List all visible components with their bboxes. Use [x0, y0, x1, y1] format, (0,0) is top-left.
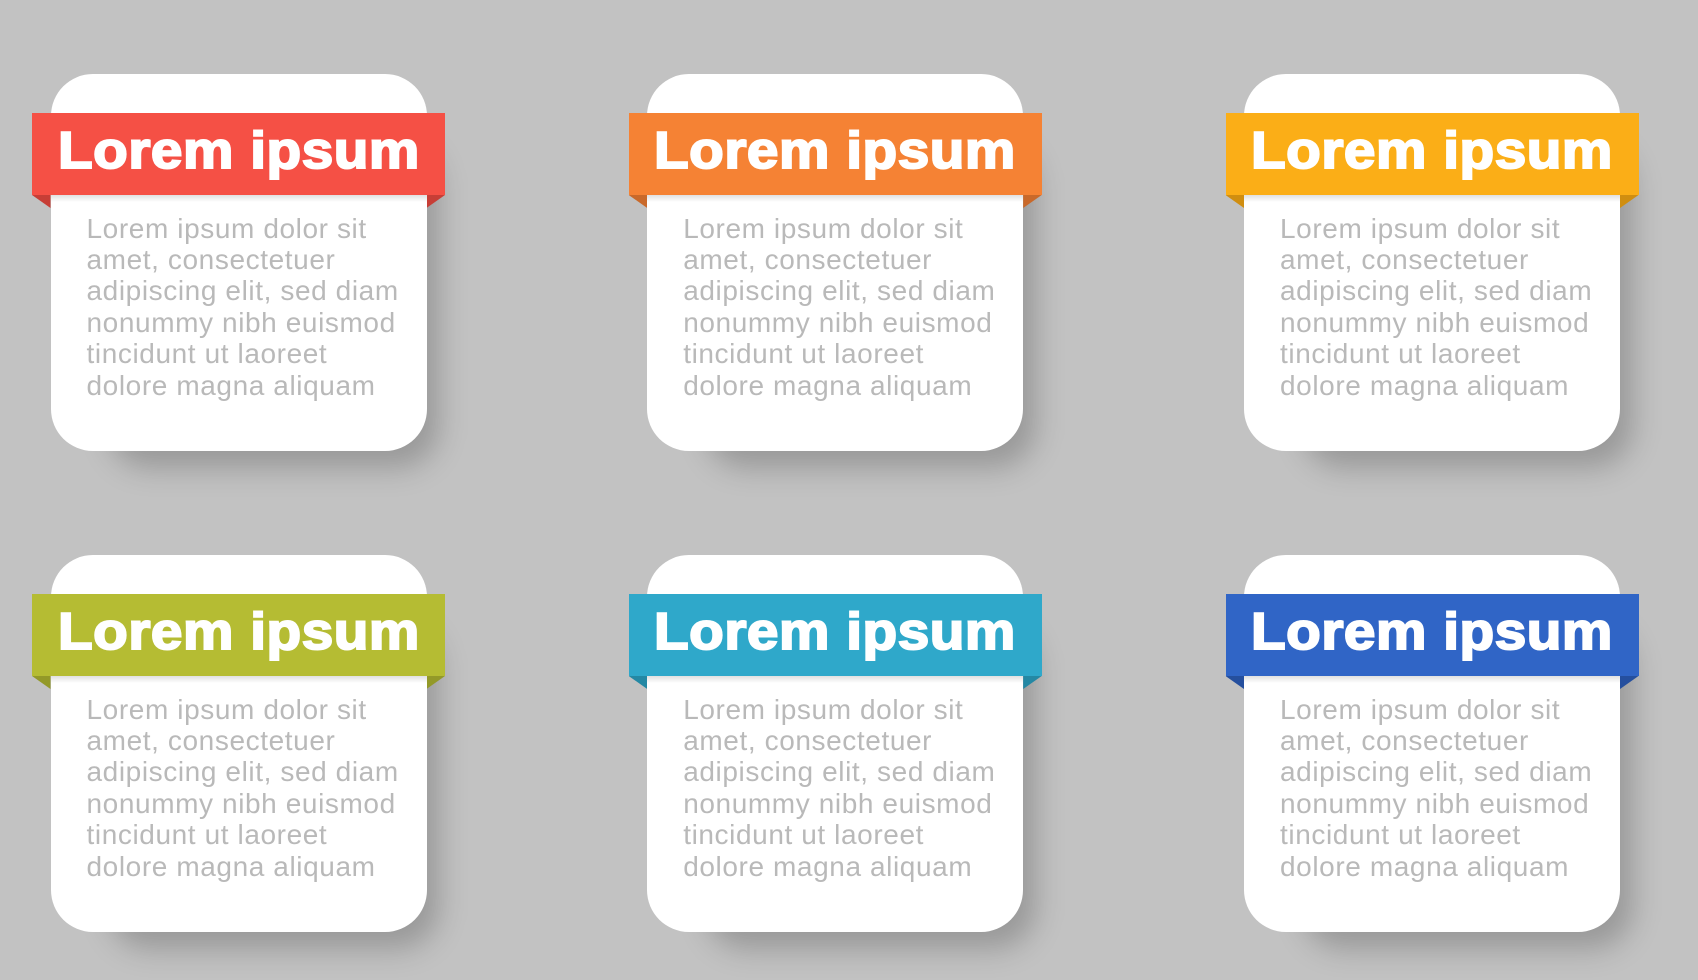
card panel: [647, 74, 1023, 451]
ribbon heading: [32, 594, 445, 676]
body text: Lorem ipsum dolor sit amet, consectetuer adipiscing elit, sed diam nonummy nibh euismod tincidunt ut laoreet dolore magna aliquam: [1280, 694, 1592, 882]
card panel: [50, 555, 426, 932]
body text: Lorem ipsum dolor sit amet, consectetuer adipiscing elit, sed diam nonummy nibh euismod tincidunt ut laoreet dolore magna aliquam: [86, 694, 399, 882]
ribbon heading: [1226, 113, 1638, 195]
card: amber: [1226, 74, 1645, 480]
card: orange: [629, 74, 1048, 480]
card: cyan: [629, 555, 1048, 961]
card: blue: [1226, 555, 1645, 961]
ribbon heading: [629, 113, 1042, 195]
card: olive: [32, 555, 451, 961]
ribbon heading: Lorem ipsum: [58, 122, 419, 180]
body text: Lorem ipsum dolor sit amet, consectetuer adipiscing elit, sed diam nonummy nibh euismod tincidunt ut laoreet dolore magna aliquam: [683, 212, 995, 401]
card panel: [1244, 555, 1620, 932]
ribbon heading: Lorem ipsum: [654, 122, 1016, 180]
ribbon heading: Lorem ipsum: [1251, 603, 1613, 661]
card panel: [50, 74, 426, 451]
ribbon heading: [1226, 594, 1638, 676]
body text: Lorem ipsum dolor sit amet, consectetuer adipiscing elit, sed diam nonummy nibh euismod tincidunt ut laoreet dolore magna aliquam: [86, 212, 399, 401]
ribbon heading: Lorem ipsum: [654, 603, 1016, 661]
ribbon heading: [32, 113, 445, 195]
ribbon heading: Lorem ipsum: [58, 603, 419, 661]
ribbon heading: [629, 594, 1042, 676]
card: red: [32, 74, 451, 480]
body text: Lorem ipsum dolor sit amet, consectetuer adipiscing elit, sed diam nonummy nibh euismod tincidunt ut laoreet dolore magna aliquam: [683, 694, 995, 882]
ribbon heading: Lorem ipsum: [1251, 122, 1613, 180]
card panel: [647, 555, 1023, 932]
body text: Lorem ipsum dolor sit amet, consectetuer adipiscing elit, sed diam nonummy nibh euismod tincidunt ut laoreet dolore magna aliquam: [1280, 212, 1592, 401]
card panel: [1244, 74, 1620, 451]
